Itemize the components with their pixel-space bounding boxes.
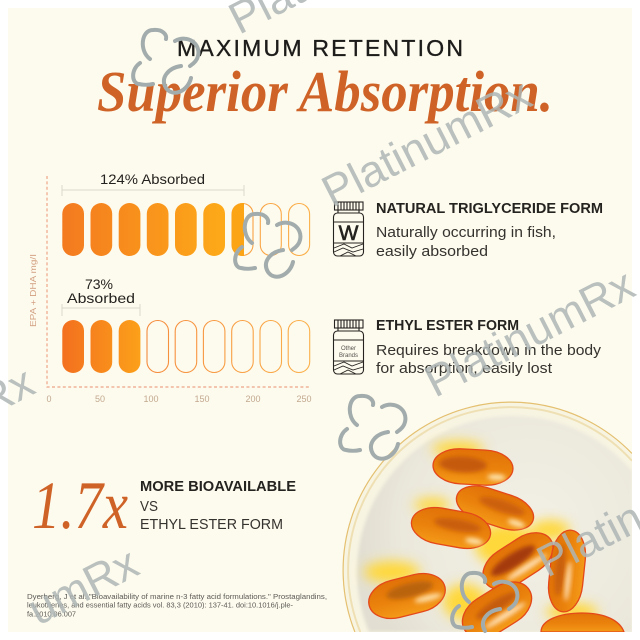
citation: Dyerberg, J et al. "Bioavailability of marine n-3 fatty acid formulations." Prostaglandins, bbox=[27, 592, 327, 601]
axis: x axis labels: 200 bbox=[245, 394, 261, 404]
bracket: 73% span bbox=[62, 304, 140, 316]
axis: x axis labels: 50 bbox=[95, 394, 105, 404]
watermark: PlatinumRx repeated: umRx bbox=[20, 538, 146, 635]
text: natural triglyceride form bbox=[376, 201, 603, 260]
label: 73% absorbed: 73% bbox=[85, 276, 113, 292]
bracket: 124% span bbox=[62, 185, 244, 196]
axis: x axis labels: 0 bbox=[46, 394, 52, 404]
text: natural triglyceride form: Naturally occurring in fish, bbox=[376, 225, 556, 241]
text: more bioavailable vs ethyl ester form bbox=[140, 479, 296, 533]
watermark: PlatinumRx repeated: PlatinumRx bbox=[417, 260, 640, 407]
text: ethyl ester form: ETHYL ESTER FORM bbox=[376, 318, 519, 334]
heading: superior absorption: Superior Absorption. bbox=[97, 59, 553, 124]
text: ethyl ester form bbox=[376, 318, 602, 377]
title: maximum retention: MAXIMUM RETENTION bbox=[177, 35, 463, 61]
citation: fa.2010.06.007 bbox=[27, 609, 76, 618]
text: ethyl ester form: for absorption, easily lost bbox=[376, 361, 552, 377]
watermark: PlatinumRx repeated: PlatinumRx bbox=[314, 70, 539, 217]
axis: dashed axes bbox=[47, 176, 310, 387]
stat: 1.7x: 1.7x bbox=[32, 467, 128, 543]
text: ethyl ester form: Requires breakdown in the body bbox=[376, 343, 602, 359]
text: natural triglyceride form: NATURAL TRIGLYCERIDE FORM bbox=[376, 201, 603, 217]
label: 73% absorbed bbox=[67, 276, 135, 306]
axis: x axis labels: 100 bbox=[143, 394, 159, 404]
text: more bioavailable vs ethyl ester form: VS bbox=[140, 499, 158, 515]
citation bbox=[27, 592, 327, 618]
axis: x axis labels: 250 bbox=[296, 394, 312, 404]
bar: natural triglyceride pills bbox=[62, 203, 310, 256]
axis: y axis label: EPA + DHA mg/I bbox=[28, 254, 38, 327]
icon: bottle other brands: Brands bbox=[339, 353, 358, 359]
text: more bioavailable vs ethyl ester form: MORE BIOAVAILABLE bbox=[140, 479, 296, 495]
icon: bottle other brands: Other bbox=[341, 346, 356, 352]
axis: x axis labels bbox=[46, 394, 312, 404]
icon: bottle W bbox=[334, 202, 364, 256]
icon: bottle W: W bbox=[339, 222, 359, 245]
image: petri dish with capsules bbox=[343, 402, 632, 640]
icon: bottle other brands bbox=[334, 320, 364, 374]
citation: leukotrienes, and essential fatty acids vol. 83,3 (2010): 137-41. doi:10.1016/j.ple- bbox=[27, 601, 294, 610]
axis: x axis labels: 150 bbox=[194, 394, 210, 404]
bar: ethyl ester pills bbox=[62, 320, 310, 373]
label: 73% absorbed: Absorbed bbox=[67, 290, 135, 306]
chart: absorption pill bars bbox=[28, 171, 312, 404]
text: natural triglyceride form: easily absorbed bbox=[376, 244, 488, 260]
label: 124% absorbed: 124% Absorbed bbox=[100, 171, 205, 187]
text: more bioavailable vs ethyl ester form: ETHYL ESTER FORM bbox=[140, 517, 283, 533]
